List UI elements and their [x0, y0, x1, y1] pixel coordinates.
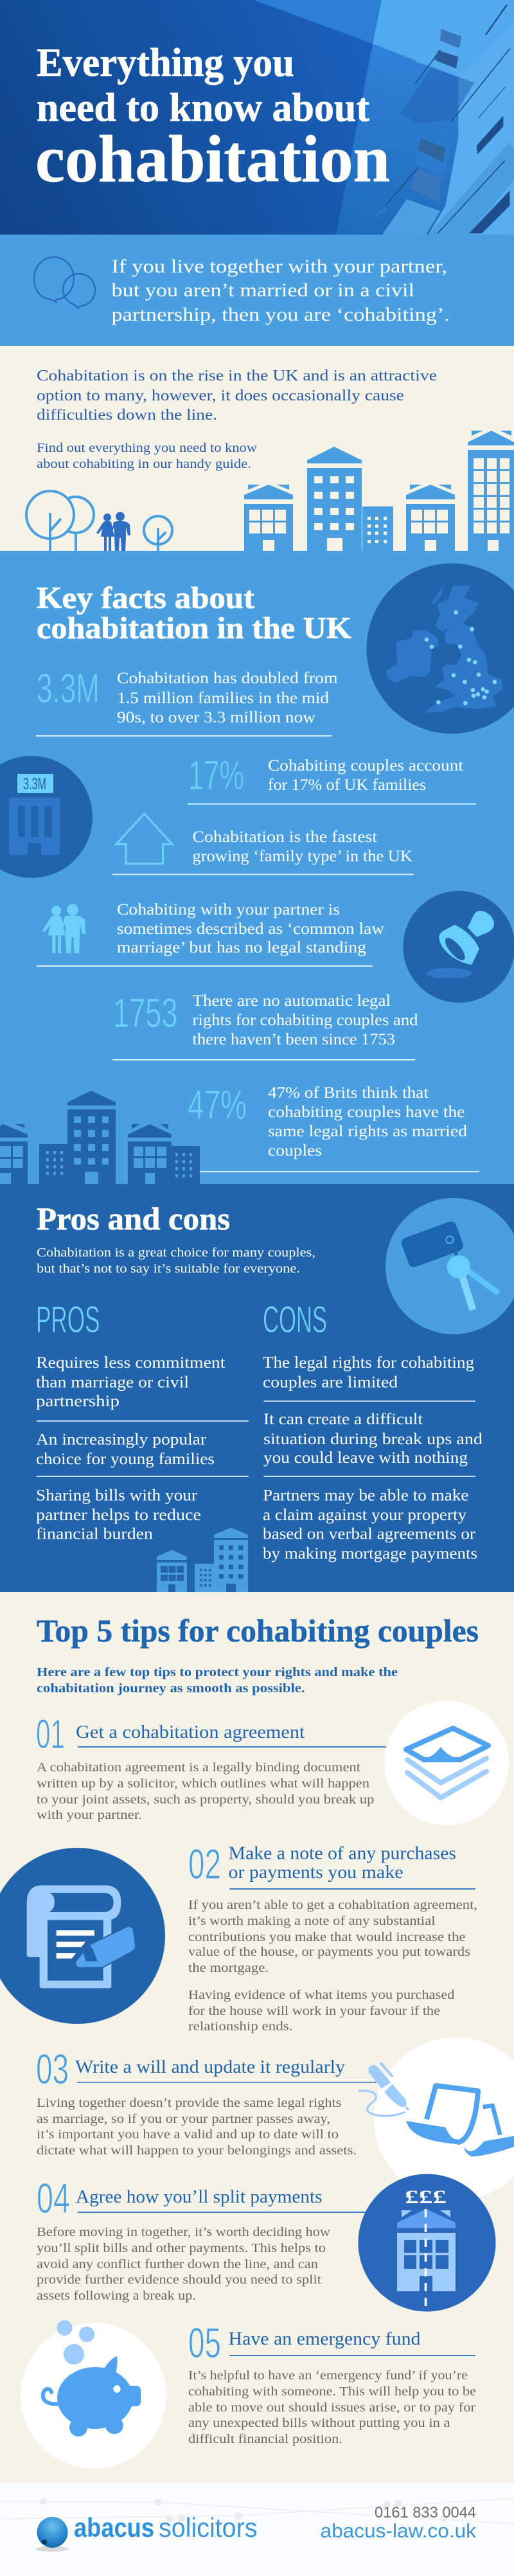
tip 2: or payments you make — [229, 1863, 403, 1883]
tip 1: to your joint assets, such as property, should you break up — [37, 1793, 374, 1807]
tip 5: difficult financial position. — [188, 2432, 342, 2446]
title: Everything you — [37, 41, 294, 85]
column: cons: It can create a difficult — [263, 1411, 423, 1428]
column: pros: than marriage or civil — [36, 1374, 189, 1391]
fact: fastest growing — [193, 828, 412, 865]
tip 3: it’s important you have a valid and up to date will to — [37, 2127, 339, 2142]
fact: fastest growing: Cohabitation is the fastest — [193, 828, 377, 846]
icon: dark skyline — [0, 1091, 200, 1184]
pros and cons intro: Cohabitation is a great choice for many couples, — [37, 1246, 315, 1260]
tip 1: with your partner. — [37, 1808, 142, 1822]
stat: 3.3M: Cohabitation has doubled from — [117, 670, 338, 687]
heading: key facts — [37, 581, 351, 645]
intro paragraph — [37, 368, 437, 424]
panel: footer — [0, 2482, 514, 2576]
icon: couple — [96, 512, 130, 551]
tip 5 — [188, 2319, 476, 2446]
stat: 3.3M: 3.3M — [37, 665, 100, 711]
stat: 47%: same legal rights as married — [268, 1123, 468, 1140]
tip 1: written up by a solicitor, which outlines what will happen — [37, 1776, 369, 1791]
guide note: about cohabiting in our handy guide. — [37, 457, 251, 471]
tip 2: relationship ends. — [188, 2019, 293, 2034]
stat: 17%: for 17% of UK families — [268, 776, 426, 794]
intro paragraph: Cohabitation is on the rise in the UK and is an attractive — [37, 368, 437, 384]
tip 3 icon: pen and will pages — [359, 2064, 514, 2156]
column: pros: partner helps to reduce — [36, 1507, 201, 1524]
panel: top 5 tips — [0, 1592, 514, 2482]
column: cons: by making mortgage payments — [263, 1545, 477, 1562]
column: pros — [36, 1299, 249, 1543]
tip 4: you’ll split bills and other payments. This helps to — [37, 2241, 326, 2255]
logo: abacus — [74, 2512, 154, 2543]
column: cons: based on verbal agreements or — [263, 1526, 476, 1543]
panel: hero header — [0, 0, 514, 235]
column: cons: The legal rights for cohabiting — [263, 1354, 475, 1372]
tip 3: as marriage, so if you or your partner passes away, — [37, 2112, 330, 2126]
tip 2 — [188, 1840, 477, 2034]
tip 2: If you aren’t able to get a cohabitation agreement, — [188, 1898, 477, 1912]
intro paragraph: difficulties down the line. — [37, 407, 217, 424]
title: cohabitation — [35, 122, 390, 196]
tip 4: Before moving in together, it’s worth deciding how — [37, 2225, 330, 2239]
tip 4: Agree how you’ll split payments — [76, 2187, 323, 2207]
contact details — [320, 2504, 476, 2542]
guide note — [37, 441, 257, 471]
icon: 3.3M building in circle — [0, 756, 93, 878]
fact: common law marriage: Cohabiting with your partner is — [117, 901, 340, 918]
stat: 1753: 1753 — [113, 990, 177, 1036]
stat: 1753: There are no automatic legal — [193, 992, 391, 1010]
tips intro: cohabitation journey as smooth as possible. — [37, 1681, 305, 1695]
icon: trees — [26, 491, 172, 551]
panel: key facts — [0, 551, 514, 1184]
heading: key facts: Key facts about — [37, 581, 254, 615]
stat: 1753: there haven’t been since 1753 — [193, 1031, 395, 1048]
tip 1: 01 — [36, 1711, 65, 1757]
tip 3: dictate what will happen to your belongings and assets. — [37, 2143, 357, 2158]
fact: common law marriage: marriage’ but has no legal standing — [117, 939, 367, 956]
stat: 47% — [188, 1082, 468, 1159]
tip 2: Make a note of any purchases — [229, 1843, 456, 1864]
stat: 3.3M: 1.5 million families in the mid — [117, 690, 330, 707]
contact details: 0161 833 0044 — [375, 2504, 476, 2521]
icon: stamp in circle — [403, 891, 514, 1003]
tip 2: value of the house, or payments you put towards — [188, 1945, 470, 1959]
tip 5: Have an emergency fund — [229, 2329, 420, 2349]
column: pros: PROS — [36, 1299, 100, 1341]
fact: fastest growing: growing ‘family type’ in the UK — [193, 848, 412, 865]
icon: small skyline — [157, 1528, 248, 1592]
tips intro: Here are a few top tips to protect your rights and make the — [37, 1665, 398, 1679]
tip 2: contributions you make that would increase the — [188, 1930, 465, 1944]
column: cons: situation during break ups and — [263, 1431, 483, 1448]
fact: common law marriage — [117, 901, 384, 956]
tip 4 icon: house and pounds in circle: £££ — [405, 2187, 447, 2208]
tip 4: assets following a break up. — [37, 2289, 196, 2303]
tip 1 — [36, 1711, 386, 1822]
stat: 47%: 47% of Brits think that — [268, 1084, 429, 1102]
panel: intro band — [0, 235, 514, 346]
intro text: If you live together with your partner, — [112, 256, 447, 277]
tip 1 icon: stacked layers in white circle — [384, 1701, 509, 1825]
tip 2: Having evidence of what items you purchased — [188, 1988, 455, 2002]
column: cons: you could leave with nothing — [263, 1449, 468, 1467]
contact details: abacus-law.co.uk — [320, 2519, 476, 2542]
column: cons: CONS — [263, 1299, 327, 1341]
tip 5: cohabiting with someone. This will help you to be — [188, 2384, 476, 2399]
hero light panels — [254, 0, 514, 235]
title: need to know about — [37, 86, 369, 130]
guide note: Find out everything you need to know — [37, 441, 257, 455]
icon: 3.3M building in circle: 3.3M — [23, 775, 46, 793]
tip 5: able to move out should issues arise, or to pay for — [188, 2401, 475, 2415]
tip 5: It’s helpful to have an ‘emergency fund’ if you’re — [188, 2368, 468, 2383]
logo — [35, 2512, 257, 2552]
heading: pros and cons: Pros and cons — [37, 1201, 230, 1237]
tip 1: Get a cohabitation agreement — [76, 1722, 305, 1742]
tip 3: Write a will and update it regularly — [75, 2057, 345, 2077]
intro text: but you aren’t married or in a civil — [112, 280, 414, 301]
intro paragraph: option to many, however, it does occasionally cause — [37, 388, 404, 404]
panel: pros and cons — [0, 1184, 514, 1592]
icon: keys in circle — [386, 1198, 514, 1334]
heading: top 5 tips: Top 5 tips for cohabiting couples — [37, 1613, 479, 1649]
tip 4 icon: house and pounds in circle — [359, 2174, 496, 2311]
tip 5: any unexpected bills without putting you in a — [188, 2416, 450, 2430]
column: pros: choice for young families — [36, 1451, 215, 1468]
icon: UK map in circle — [366, 563, 514, 734]
tip 2: 02 — [188, 1840, 221, 1888]
column: cons: a claim against your property — [263, 1507, 467, 1524]
tip 5 icon: piggy bank in circle — [21, 2320, 166, 2469]
icon: couple — [42, 904, 85, 953]
intro text: partnership, then you are ‘cohabiting’. — [112, 304, 450, 325]
stat: 17%: 17% — [188, 752, 244, 798]
column: cons: Partners may be able to make — [263, 1487, 469, 1504]
stat: 47%: couples — [268, 1142, 322, 1159]
stat: 3.3M: 90s, to over 3.3 million now — [117, 709, 315, 726]
tip 3: Living together doesn’t provide the same legal rights — [37, 2096, 342, 2110]
intro text — [112, 256, 450, 325]
panel: introduction — [0, 346, 514, 551]
tip 3: 03 — [36, 2045, 69, 2093]
tip 1: A cohabitation agreement is a legally binding document — [37, 1760, 360, 1775]
title — [35, 41, 390, 196]
tip 3 white circle — [374, 2037, 514, 2201]
column: pros: financial burden — [36, 1526, 154, 1543]
heading: key facts: cohabitation in the UK — [37, 611, 351, 645]
stat: 17%: Cohabiting couples account — [268, 757, 463, 774]
icon: speech bubbles — [34, 257, 95, 308]
pros and cons intro: but that’s not to say it’s suitable for everyone. — [37, 1262, 300, 1276]
tip 3 — [36, 2045, 377, 2158]
icon: skyline — [244, 431, 514, 551]
stat: 1753: rights for cohabiting couples and — [193, 1012, 418, 1029]
tips intro — [37, 1665, 398, 1695]
tip 2: the mortgage. — [188, 1961, 269, 1975]
column: cons: couples are limited — [263, 1374, 398, 1391]
tip 5: 05 — [188, 2319, 221, 2366]
logo: solicitors — [159, 2512, 257, 2543]
stat: 47%: cohabiting couples have the — [268, 1104, 465, 1121]
fact: common law marriage: sometimes described as ‘common law — [117, 920, 384, 938]
column: pros: An increasingly popular — [36, 1431, 207, 1449]
skyline windows — [249, 458, 510, 551]
tip 4: provide further evidence should you need to split — [37, 2273, 321, 2287]
stat: 47%: 47% — [188, 1082, 247, 1128]
stat: 17% — [188, 752, 463, 798]
tip 4: avoid any conflict further down the line, and can — [37, 2257, 318, 2271]
column: cons — [263, 1299, 483, 1562]
pros and cons intro — [37, 1246, 315, 1276]
tip 2: it’s worth making a note of any substantial — [188, 1914, 436, 1928]
tip 2: for the house will work in your favour if the — [188, 2004, 440, 2018]
tip 4 — [37, 2174, 366, 2303]
stat: 3.3M — [37, 665, 338, 726]
tip 2 icon: document and pen in circle — [0, 1848, 165, 2024]
icon: up arrow house — [116, 814, 172, 864]
column: pros: Sharing bills with your — [36, 1487, 198, 1504]
hero building photo — [375, 0, 514, 235]
stat: 1753 — [113, 990, 418, 1048]
tip 4: 04 — [37, 2174, 70, 2222]
column: pros: partnership — [36, 1393, 120, 1410]
column: pros: Requires less commitment — [36, 1354, 226, 1372]
